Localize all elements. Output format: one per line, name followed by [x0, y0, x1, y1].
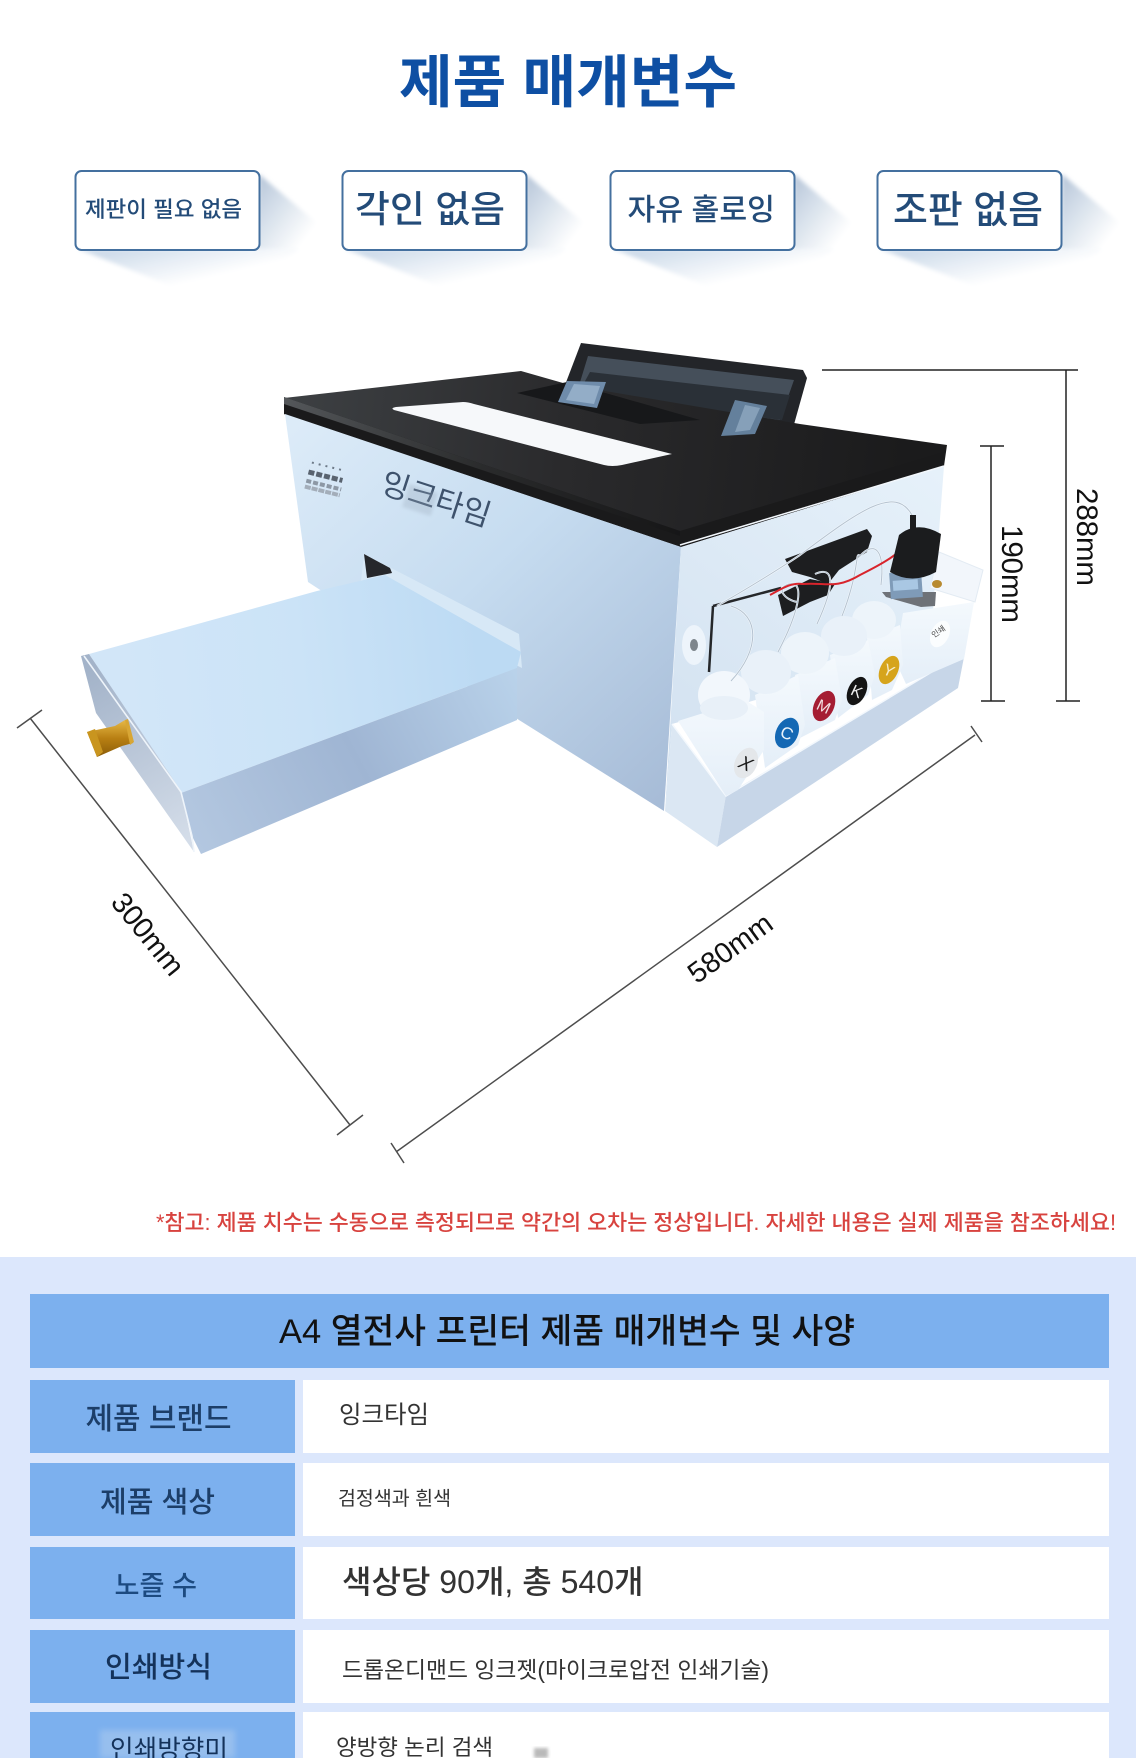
red wire — [770, 531, 921, 595]
title: 제품 매개변수 — [399, 51, 737, 115]
row: brand: 잉크타임 — [339, 1401, 429, 1429]
side mount edge — [709, 588, 781, 672]
row: color: 검정색과 흰색 — [338, 1488, 451, 1510]
internal black bars — [778, 529, 872, 616]
ink label X: X — [734, 752, 757, 777]
bottle: C — [741, 650, 805, 768]
dimension: 300mm: 300mm — [104, 887, 190, 982]
dimension: 288mm — [822, 370, 1103, 701]
adjusting knob — [87, 719, 134, 757]
bottle: K — [821, 616, 875, 718]
row: color — [30, 1463, 1109, 1536]
dimension: 288mm: 288mm — [1070, 488, 1103, 586]
row: brand — [30, 1380, 1109, 1453]
ink tank base side — [717, 652, 965, 847]
dimension: 580mm: 580mm — [682, 907, 779, 990]
ink label Y: Y — [880, 661, 897, 681]
badge: no typesetting — [878, 171, 1135, 288]
top white window — [392, 402, 672, 466]
ink label C: C — [777, 722, 796, 745]
feature badge row — [76, 171, 1135, 288]
badge: free rolling — [610, 171, 867, 288]
solenoid valve — [882, 515, 941, 607]
row: print direction — [30, 1712, 1109, 1758]
front panel indicator labels — [305, 462, 346, 495]
side panel — [665, 466, 944, 811]
badge: no plate required: 제판이 필요 없음 — [85, 197, 242, 222]
ink label M — [808, 687, 840, 725]
output tray left side — [81, 654, 194, 852]
table header: A4 열전사 프린터 제품 매개변수 및 사양 — [279, 1313, 855, 1351]
ink label K — [843, 674, 871, 708]
ink label X — [729, 744, 763, 782]
output tray front — [181, 668, 517, 854]
ink label C — [770, 714, 804, 752]
table header — [30, 1294, 1109, 1368]
clear ink tubes — [717, 502, 912, 681]
waste tank — [895, 552, 983, 684]
waste tank: 인쇄 — [929, 623, 947, 640]
row: print method: 드롭온디맨드 잉크젯(마이크로압전 인쇄기술) — [342, 1657, 769, 1683]
measurement note: *참고: 제품 치수는 수동으로 측정되므로 약간의 오차는 정상입니다. 자세한 내용은 실제 제품을 참조하세요! — [156, 1210, 1116, 1235]
row: nozzle count — [30, 1547, 1109, 1619]
dimension: 190mm: 190mm — [995, 525, 1028, 623]
printer illustration — [81, 343, 983, 854]
smudge over brand name — [402, 484, 438, 516]
dimension: 300mm — [17, 710, 363, 1135]
feed slot and clips — [517, 381, 767, 436]
row: nozzle count: 노즐 수 — [114, 1571, 197, 1601]
ink bottles — [678, 601, 903, 796]
tray edge highlight — [84, 656, 194, 852]
bottle: X — [678, 671, 764, 796]
panel background — [0, 1257, 1136, 1758]
ink label M: M — [814, 697, 833, 718]
badge: no engraving: 각인 없음 — [355, 189, 505, 230]
ink label K: K — [848, 682, 865, 702]
dimension: 580mm — [391, 726, 982, 1163]
badge: no plate required — [76, 171, 332, 288]
mounting screw — [682, 625, 706, 665]
printer top cover — [284, 371, 947, 547]
ink label Y — [875, 653, 903, 687]
side panel cover plate — [680, 466, 944, 545]
specification panel — [0, 1257, 1136, 1758]
brass fitting — [932, 580, 942, 588]
row: brand: 제품 브랜드 — [86, 1403, 232, 1436]
row: print method: 인쇄방식 — [105, 1651, 212, 1684]
output slot — [360, 554, 522, 668]
bottle: M — [781, 632, 842, 738]
row: color: 제품 색상 — [100, 1486, 215, 1519]
ink tank base front — [665, 724, 726, 847]
bottle: Y — [852, 601, 903, 700]
brand name on printer: 잉크타임 — [377, 465, 495, 534]
output tray top — [89, 575, 521, 793]
row: nozzle count: 색상당 90개, 총 540개 — [342, 1564, 644, 1600]
paper feed cover — [560, 343, 807, 428]
badge: free rolling: 자유 홀로잉 — [628, 194, 775, 227]
base highlight — [672, 652, 965, 796]
front panel — [285, 414, 681, 811]
row: print method — [30, 1630, 1109, 1703]
dimension: 190mm — [980, 446, 1028, 701]
output slot dark gap — [364, 554, 392, 578]
badge: no typesetting: 조판 없음 — [893, 190, 1043, 232]
badge: no engraving — [342, 171, 599, 288]
